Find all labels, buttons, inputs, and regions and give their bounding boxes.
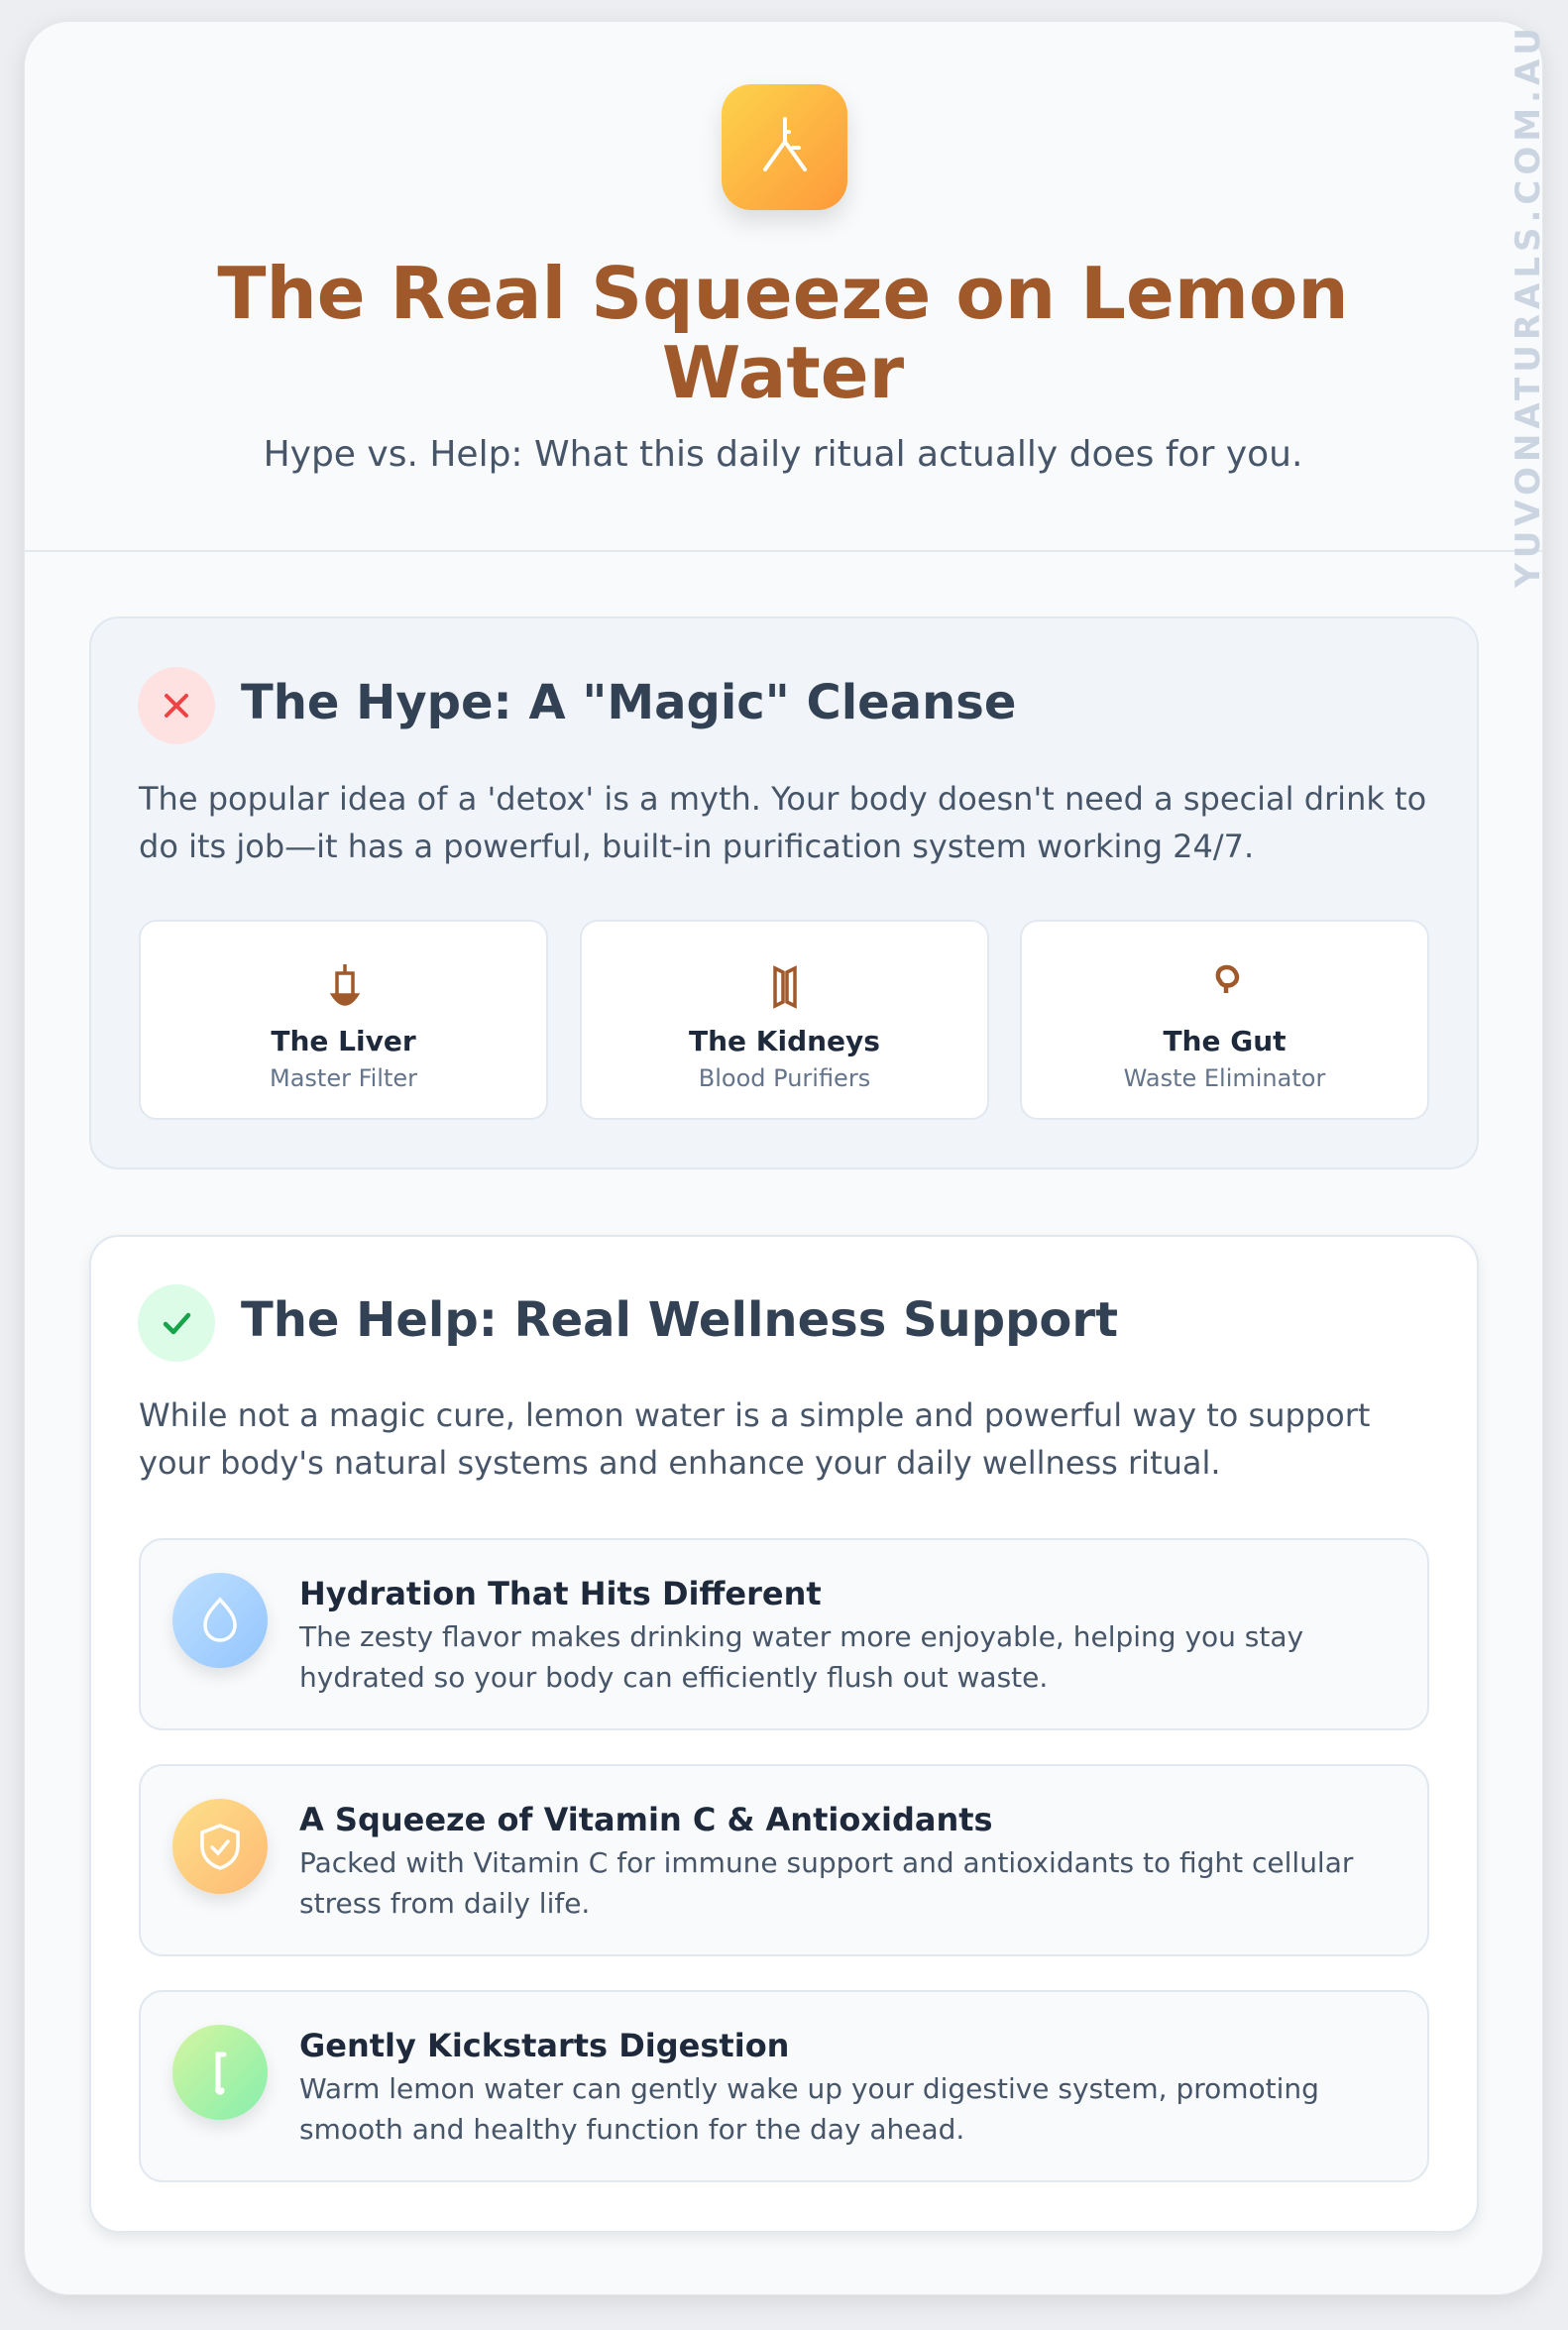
benefit: vitamin c: A Squeeze of Vitamin C & Antioxidants: [299, 1801, 993, 1838]
hype paragraph: do its job—it has a powerful, built-in purification system working 24/7.: [139, 828, 1254, 865]
heading: the help: The Help: Real Wellness Support: [241, 1292, 1118, 1348]
panel: the help: [89, 1235, 1479, 2233]
benefit: digestion: Warm lemon water can gently wake up your digestive system, promoting smooth and healthy function for the day ahead.: [299, 2072, 1319, 2145]
benefit: hydration: Hydration That Hits Different: [299, 1575, 822, 1612]
title: Water: [662, 331, 904, 414]
benefit: vitamin c: [139, 1764, 1429, 1956]
title: [217, 252, 1349, 414]
hype paragraph: The popular idea of a 'detox' is a myth. Your body doesn't need a special drink to: [139, 780, 1426, 818]
organ card: gut: [1020, 920, 1429, 1120]
organ card: liver: [139, 920, 548, 1120]
benefit: vitamin c: Packed with Vitamin C for immune support and antioxidants to fight cellular stress from daily life.: [299, 1846, 1353, 1919]
icon: green check: [138, 1284, 215, 1362]
organ card: liver: The Liver: [271, 1025, 416, 1057]
hype paragraph: [139, 780, 1426, 865]
title: The Real Squeeze on Lemon: [217, 252, 1349, 335]
watermark: YUVONATURALS.COM.AU: [1509, 23, 1548, 588]
organ card: kidneys: The Kidneys: [689, 1025, 880, 1057]
icon: water drop: [172, 1573, 268, 1668]
help paragraph: your body's natural systems and enhance your daily wellness ritual.: [139, 1444, 1221, 1482]
panel: the hype: [89, 616, 1479, 1169]
benefit: digestion: [139, 1990, 1429, 2182]
benefit: digestion: Gently Kickstarts Digestion: [299, 2027, 789, 2064]
organ card: kidneys: [580, 920, 989, 1120]
organ card: liver: Master Filter: [270, 1064, 417, 1092]
divider: [25, 550, 1542, 552]
icon: digestion: [172, 2025, 268, 2120]
help paragraph: While not a magic cure, lemon water is a simple and powerful way to support: [139, 1396, 1370, 1434]
icon: shield: [172, 1799, 268, 1894]
icon: app logo: [722, 84, 847, 210]
organ card: gut: The Gut: [1163, 1025, 1287, 1057]
benefit: hydration: [139, 1538, 1429, 1730]
heading: the hype: The Hype: A "Magic" Cleanse: [241, 675, 1016, 730]
icon: kidneys: [773, 965, 797, 1009]
benefit: hydration: The zesty flavor makes drinking water more enjoyable, helping you stay hydrated so your body can efficiently flush out waste.: [299, 1620, 1303, 1693]
organ card: kidneys: Blood Purifiers: [699, 1064, 870, 1092]
icon: liver: [329, 964, 361, 1006]
icon: red x: [138, 667, 215, 744]
organ card: gut: Waste Eliminator: [1124, 1064, 1325, 1092]
help paragraph: [139, 1396, 1370, 1482]
subtitle: Hype vs. Help: What this daily ritual actually does for you.: [264, 434, 1302, 475]
icon: gut: [1215, 965, 1239, 993]
